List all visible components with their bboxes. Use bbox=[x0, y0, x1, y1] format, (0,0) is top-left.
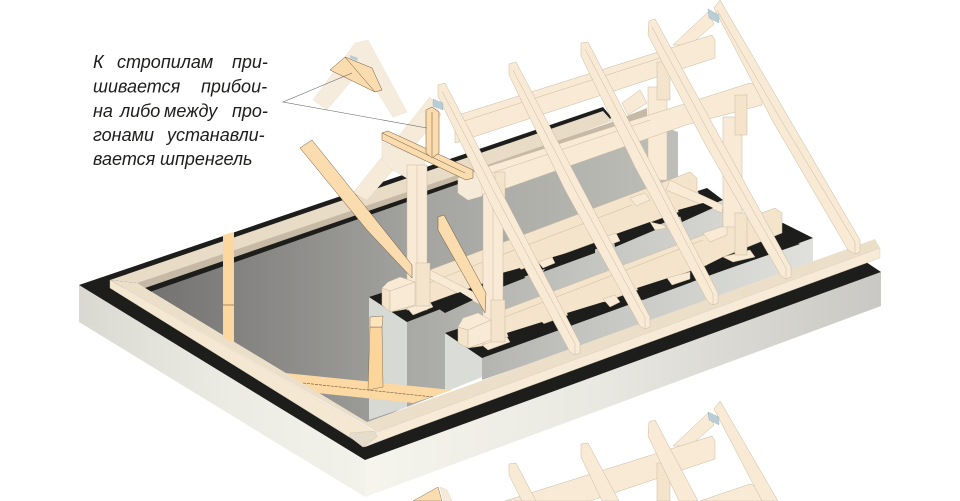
exposed black strips between cleats bbox=[433, 203, 800, 346]
struts between post and sleeper bbox=[430, 270, 483, 306]
rafter 4 bbox=[581, 42, 718, 305]
callout text bbox=[93, 52, 268, 169]
callout text: при- bbox=[232, 52, 268, 72]
purlin upper bbox=[455, 35, 715, 143]
rafter 6 bbox=[714, 0, 860, 254]
back sill beam bbox=[110, 108, 647, 292]
long diagonal brace bbox=[300, 140, 412, 278]
back truss struts bbox=[622, 12, 714, 115]
rafter 5 bbox=[648, 19, 791, 279]
sleeper cleats bbox=[538, 193, 727, 307]
sleeper front block 2 bbox=[458, 313, 491, 348]
callout text: либо bbox=[119, 101, 160, 121]
callout text: шивается bbox=[93, 76, 181, 96]
callout text: гонами bbox=[93, 125, 154, 145]
callout text: шпренгель bbox=[160, 149, 252, 169]
posts bbox=[353, 87, 742, 344]
shprengel crossbar and vertical bbox=[382, 107, 473, 180]
rafter 3 bbox=[509, 62, 650, 329]
callout text: на bbox=[93, 101, 113, 121]
left upright post bbox=[223, 232, 234, 343]
sleepers on ribs bbox=[382, 172, 782, 348]
inset detail: truss with nailed plank bbox=[313, 40, 407, 117]
callout text: вается bbox=[93, 149, 156, 169]
purlin lower bbox=[480, 83, 762, 195]
callout text: устанавли- bbox=[165, 125, 265, 145]
stub post and floor planks bbox=[285, 316, 452, 403]
foundation rib 2 bbox=[445, 238, 813, 392]
callout text: стропилам bbox=[117, 52, 213, 72]
upper clamps bbox=[458, 62, 747, 200]
metal plates bbox=[433, 9, 719, 110]
sleeper front block 1 bbox=[382, 277, 415, 312]
callout text: К bbox=[93, 52, 105, 72]
callout text: прибои- bbox=[201, 76, 267, 96]
black tops of ribs bbox=[369, 188, 813, 358]
interior floor bbox=[150, 118, 678, 425]
foundation rib 1 bbox=[369, 200, 723, 420]
sill beam, L-shaped bbox=[110, 239, 880, 447]
rafter 2 bbox=[438, 83, 580, 355]
callout text: про- bbox=[232, 101, 268, 121]
short diagonal brace bbox=[438, 215, 486, 313]
post bases bbox=[407, 250, 755, 350]
slab: foundation wall bbox=[79, 107, 881, 497]
callout text: между bbox=[164, 101, 218, 121]
leader lines bbox=[283, 73, 427, 128]
second figure cropped at bottom bbox=[413, 401, 778, 501]
post clamps bbox=[416, 213, 747, 342]
